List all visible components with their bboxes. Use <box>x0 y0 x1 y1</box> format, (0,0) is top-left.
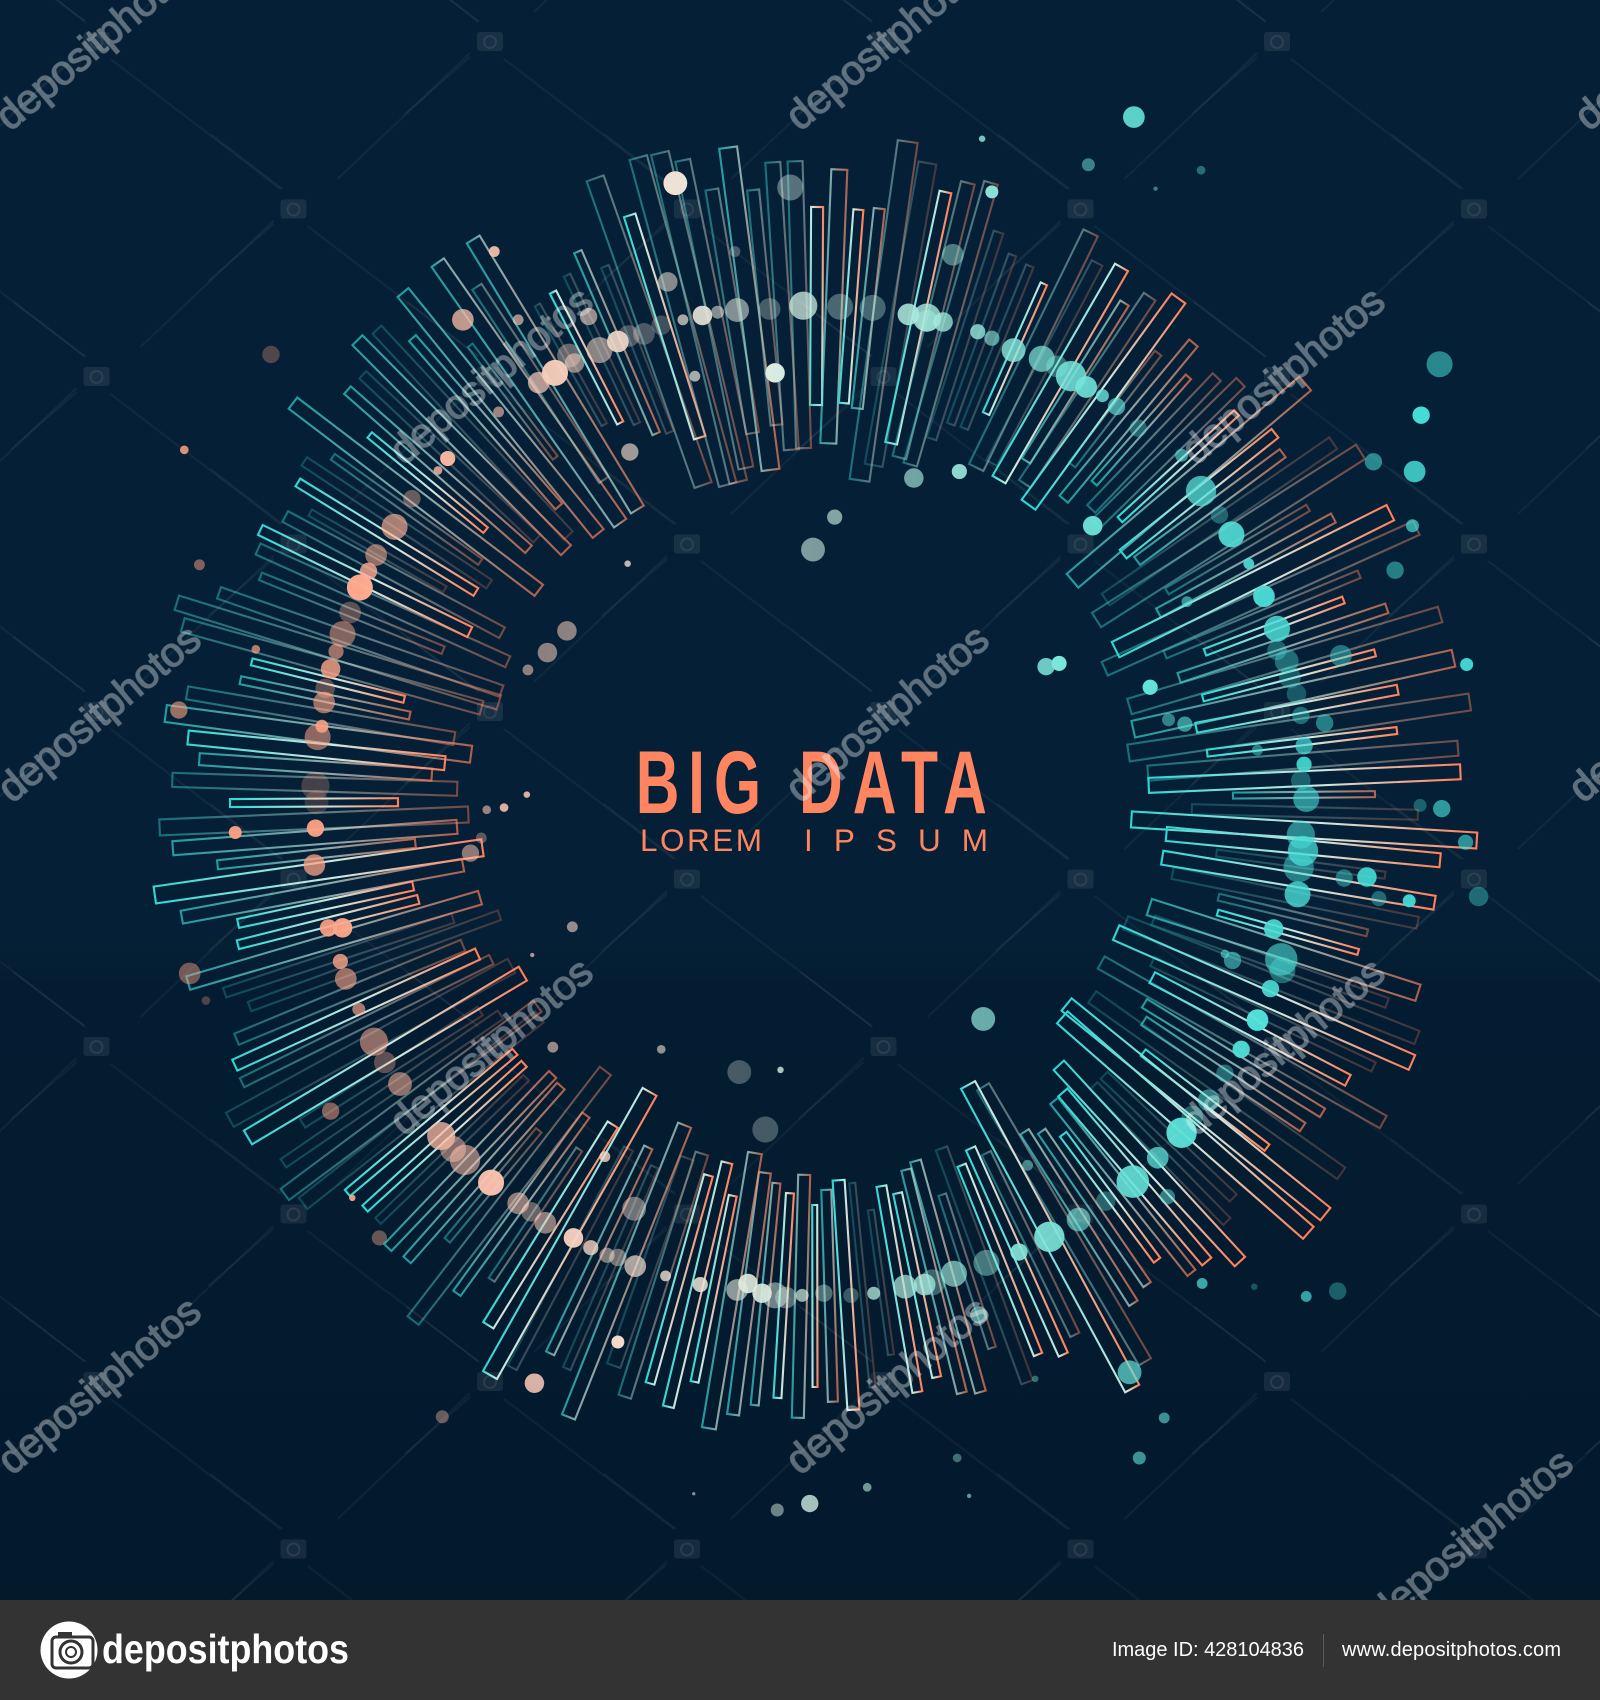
watermark text: depositphotos <box>380 277 601 473</box>
watermark text: depositphotos <box>776 615 997 811</box>
bars: top right arc <box>810 140 1156 488</box>
data dots <box>170 106 1488 1517</box>
bars: bottom left arc <box>483 1088 810 1429</box>
subheading: lorem ipsum: IPSUM <box>804 822 988 858</box>
footer logo wordmark: depositphotos <box>102 1626 349 1672</box>
subheading: lorem ipsum <box>640 822 988 858</box>
scattered dots <box>170 106 1488 1517</box>
icon: depositphotos camera logo <box>40 1622 98 1678</box>
heading: big data: BIG DATA <box>636 733 987 833</box>
ring of dots <box>301 292 1319 1308</box>
watermark text: depositphotos <box>1360 1439 1581 1635</box>
bars: bottom right arc <box>812 1081 1151 1410</box>
title <box>636 733 988 858</box>
bars: right arc <box>1022 293 1477 1276</box>
watermark text: depositphotos <box>1172 277 1393 473</box>
bars: top left arc <box>432 146 811 527</box>
website url: www.depositphotos.com <box>1341 1639 1561 1661</box>
footer bar <box>0 1600 1600 1700</box>
radial bars ring <box>154 140 1477 1429</box>
watermark text: depositphotos <box>1172 948 1393 1144</box>
bars: left arc <box>154 288 611 1325</box>
subheading: lorem ipsum: LOREM <box>640 822 762 858</box>
footer divider <box>1323 1634 1324 1667</box>
image id: Image ID: 428104836 <box>1112 1639 1304 1661</box>
watermark text: depositphotos <box>380 948 601 1144</box>
watermark text: depositphotos <box>776 1287 997 1483</box>
